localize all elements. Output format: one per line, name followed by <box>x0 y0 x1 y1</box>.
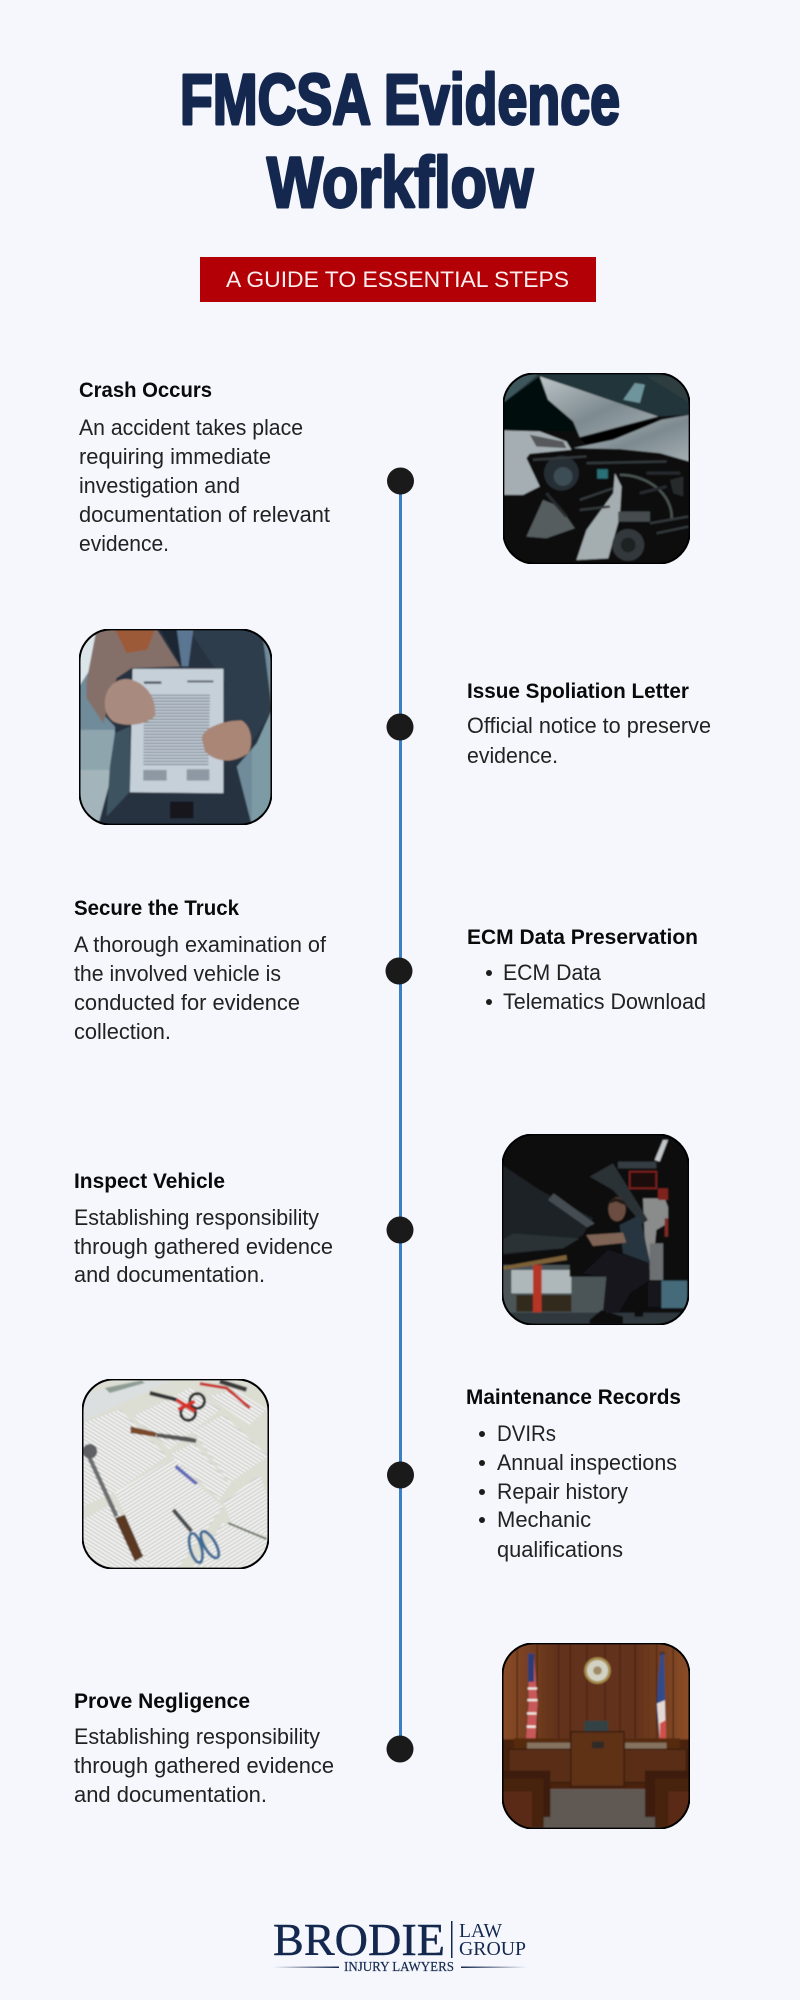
description: collection. <box>74 1019 171 1044</box>
timeline node 6 <box>386 1736 414 1762</box>
photo: crashed car <box>503 373 690 564</box>
logo: Brodie Law Group <box>273 1914 527 1974</box>
description <box>74 932 327 1044</box>
bullet list: Telematics Download <box>503 989 706 1014</box>
timeline node 3 <box>386 958 412 984</box>
bullet list <box>479 1421 677 1562</box>
description: Establishing responsibility <box>74 1724 320 1749</box>
photo: maintenance records and tools <box>82 1379 269 1569</box>
heading: Crash Occurs <box>79 379 212 402</box>
bullet list: DVIRs <box>497 1421 556 1446</box>
heading: Secure the Truck <box>74 897 239 920</box>
bullet list: Repair history <box>497 1479 628 1504</box>
photo: man holding document <box>79 629 272 825</box>
logo: Brodie Law Group: LAW <box>459 1920 502 1942</box>
description: evidence. <box>79 531 169 556</box>
photo: mechanic inspecting truck <box>502 1134 689 1325</box>
step: Maintenance Records <box>466 1386 681 1562</box>
logo: Brodie Law Group: GROUP <box>459 1938 526 1960</box>
title: Workflow <box>267 144 534 223</box>
infographic canvas <box>74 70 710 1972</box>
heading: Issue Spoliation Letter <box>467 680 689 703</box>
description: An accident takes place <box>79 415 303 440</box>
description: through gathered evidence <box>74 1753 334 1778</box>
description: Official notice to preserve <box>467 713 711 738</box>
title <box>180 61 620 223</box>
timeline line <box>399 482 402 1749</box>
bullet list: ECM Data <box>503 960 602 985</box>
description: through gathered evidence <box>74 1234 333 1259</box>
description: evidence. <box>467 743 558 768</box>
description: conducted for evidence <box>74 990 300 1015</box>
description: investigation and <box>79 473 240 498</box>
step: Inspect Vehicle <box>74 1170 333 1287</box>
step: Prove Negligence <box>74 1690 334 1807</box>
description: requiring immediate <box>79 444 271 469</box>
logo: Brodie Law Group: BRODIE <box>273 1914 445 1965</box>
description: A thorough examination of <box>74 932 327 957</box>
subtitle banner: A GUIDE TO ESSENTIAL STEPS <box>226 267 569 292</box>
subtitle banner <box>200 257 596 302</box>
step: Issue Spoliation Letter <box>467 680 711 768</box>
timeline node 5 <box>387 1462 414 1488</box>
step: Crash Occurs <box>79 379 330 556</box>
step: Secure the Truck <box>74 897 327 1044</box>
description <box>79 415 330 556</box>
timeline node 1 <box>387 468 414 494</box>
heading: ECM Data Preservation <box>467 926 698 949</box>
title: FMCSA Evidence <box>180 61 620 140</box>
description <box>74 1205 333 1287</box>
description: and documentation. <box>74 1782 267 1807</box>
heading: Maintenance Records <box>466 1386 681 1409</box>
heading: Prove Negligence <box>74 1690 250 1713</box>
description <box>467 713 711 768</box>
timeline node 4 <box>386 1216 414 1244</box>
photo: courtroom <box>502 1643 690 1829</box>
step: ECM Data Preservation <box>467 926 706 1014</box>
description: the involved vehicle is <box>74 961 281 986</box>
description: and documentation. <box>74 1262 265 1287</box>
bullet list: Annual inspections <box>497 1450 677 1475</box>
timeline node 2 <box>386 714 414 740</box>
description: Establishing responsibility <box>74 1205 319 1230</box>
bullet list <box>486 960 706 1014</box>
bullet list: qualifications <box>497 1537 623 1562</box>
description: documentation of relevant <box>79 502 330 527</box>
description <box>74 1724 334 1807</box>
timeline <box>386 468 414 1762</box>
heading: Inspect Vehicle <box>74 1170 225 1193</box>
logo: Brodie Law Group: INJURY LAWYERS <box>344 1959 454 1974</box>
bullet list: Mechanic <box>497 1507 591 1532</box>
